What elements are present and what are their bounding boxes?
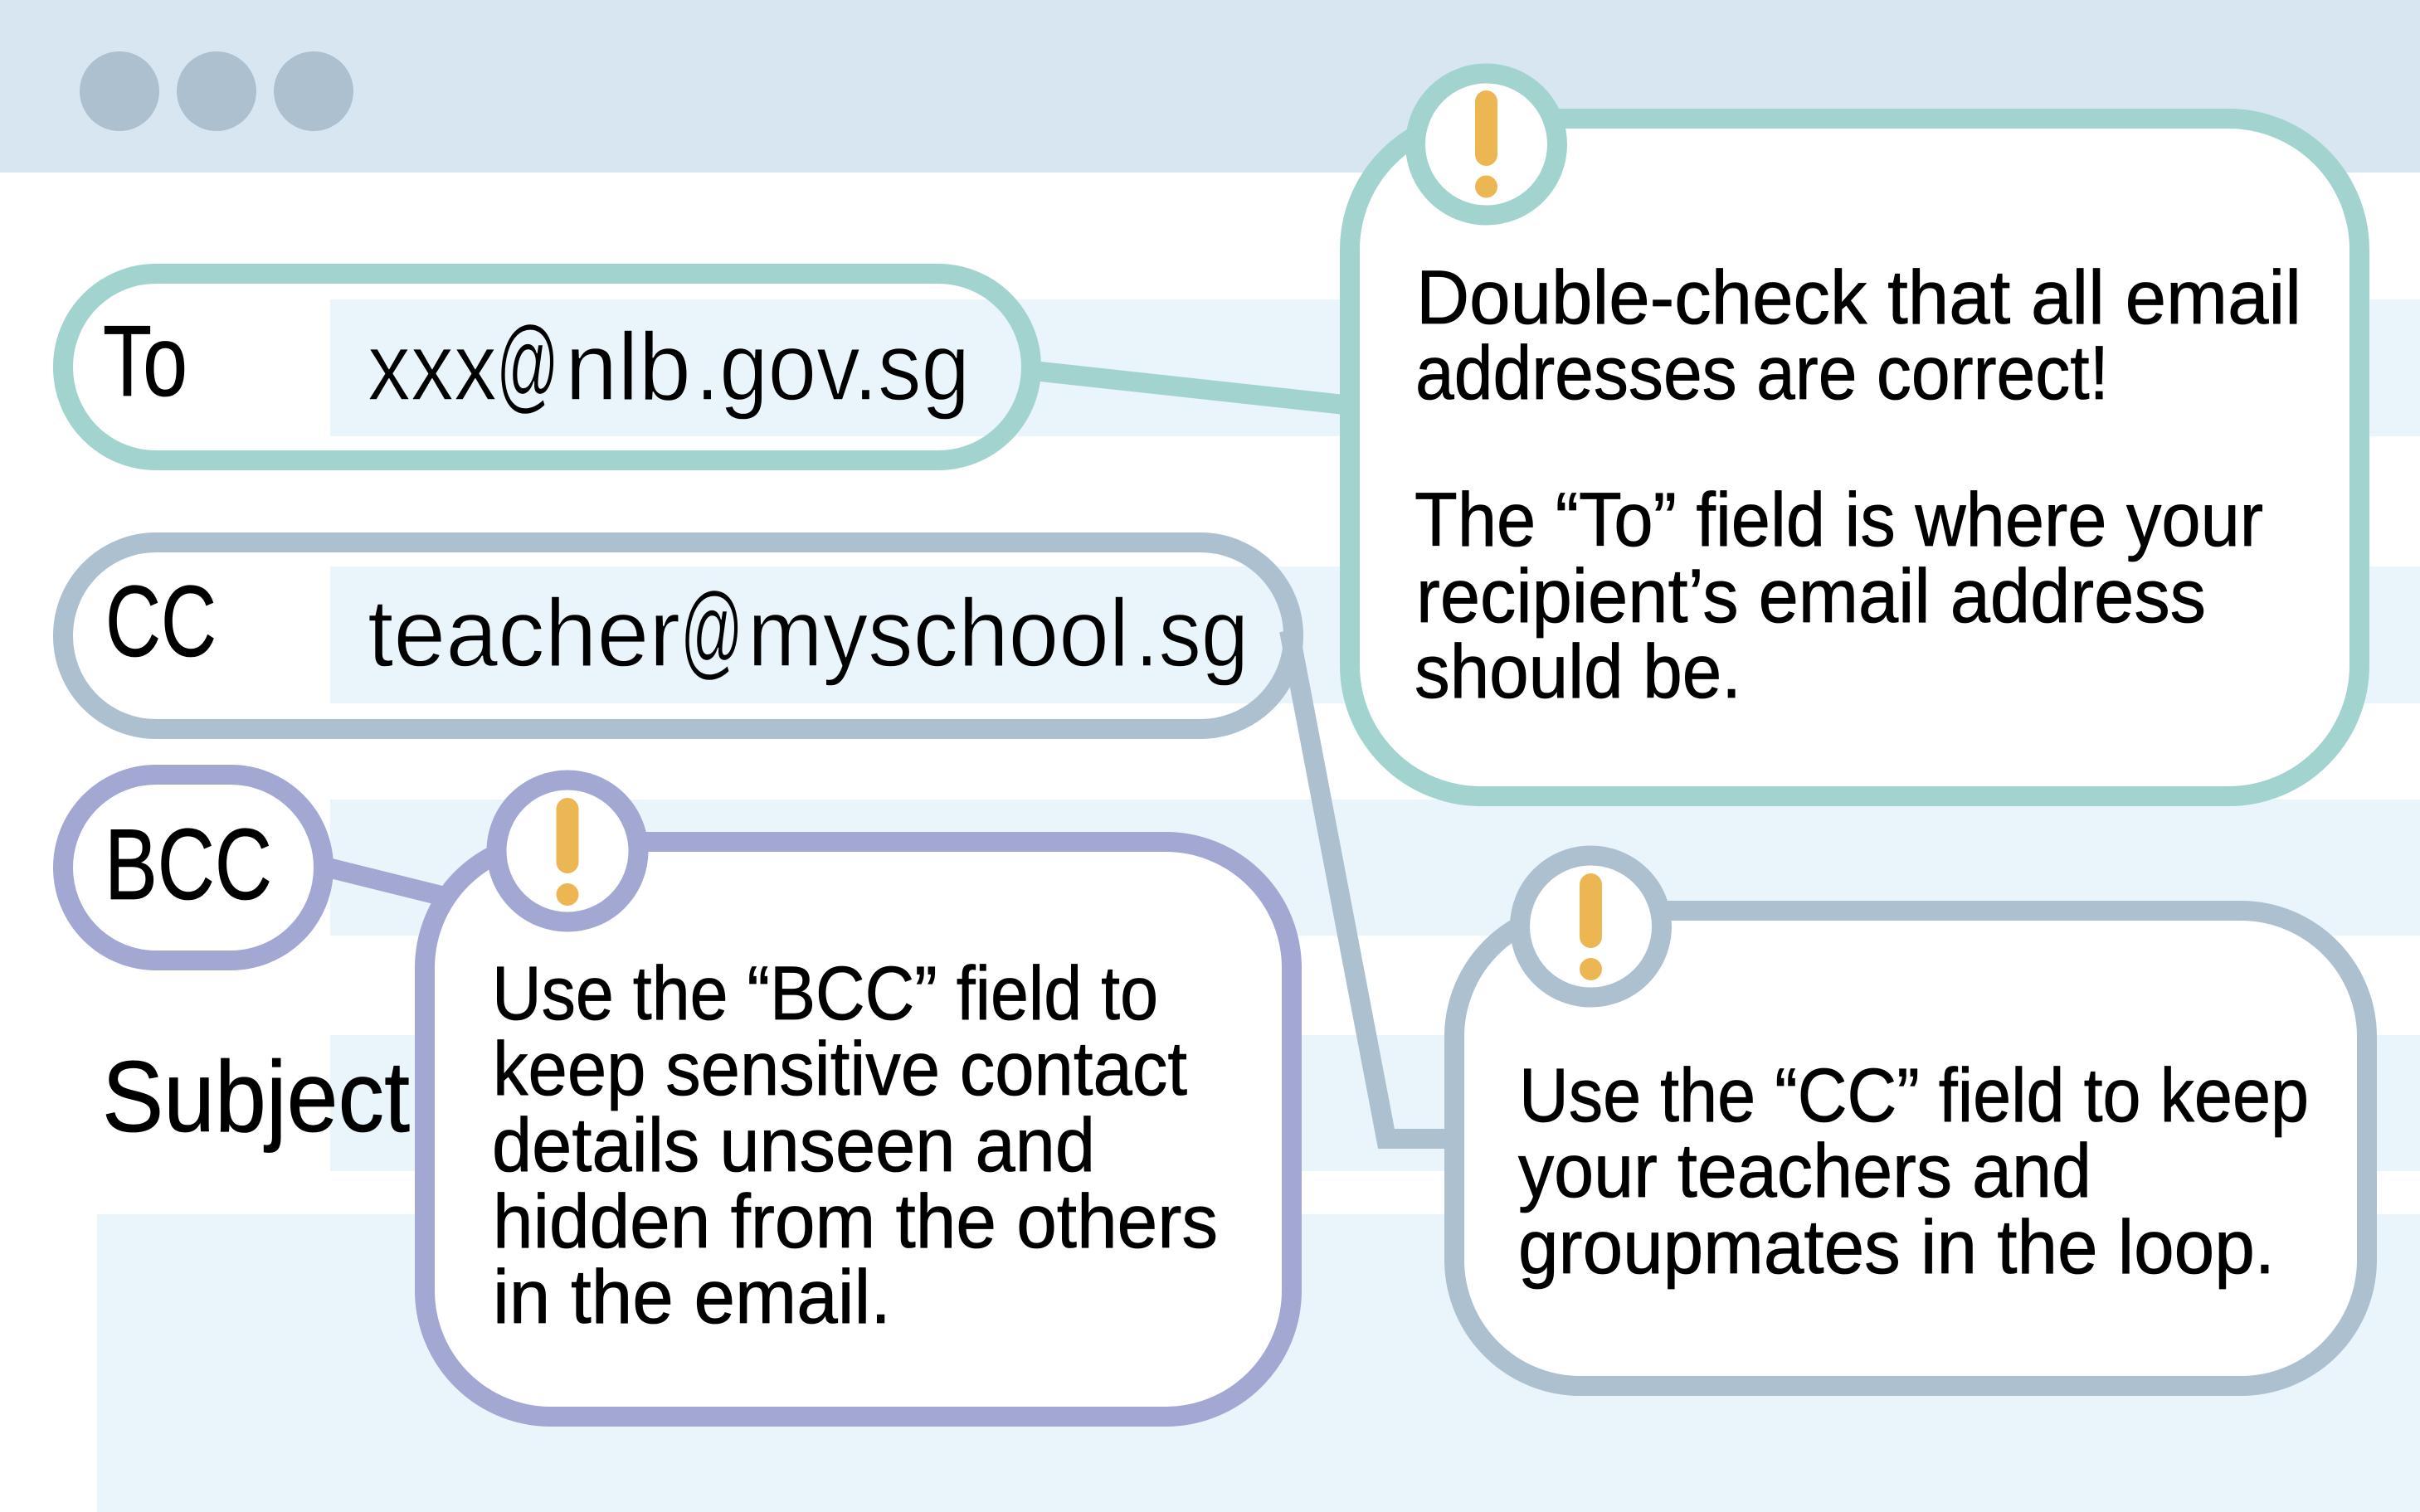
callout text: groupmates in the loop. [1518, 1205, 2275, 1290]
value: To address: @ [496, 305, 559, 422]
To field [63, 274, 1031, 460]
callout text: Use the “CC” field to keep [1519, 1053, 2309, 1138]
callout text: should be. [1415, 630, 1741, 714]
connector: BCC field to callout [328, 868, 448, 897]
callout text: recipient’s email address [1416, 554, 2206, 639]
connector: To field to callout [1033, 371, 1352, 406]
browser header bar [0, 0, 2420, 173]
label: To: To [103, 304, 187, 417]
CC field [63, 542, 1293, 729]
label: CC: CC [105, 565, 217, 678]
callout text: in the email. [493, 1255, 891, 1339]
icon: exclamation badge [1520, 856, 1662, 997]
label: BCC: BCC [105, 808, 272, 921]
value: CC address: @ [680, 571, 743, 688]
BCC field [63, 775, 324, 960]
value: To address: xxx [368, 313, 497, 421]
callout text [1518, 1053, 2309, 1290]
callout: To field [1350, 73, 2359, 796]
callout text [1415, 255, 2301, 714]
callout text: The “To” field is where your [1415, 478, 2263, 562]
callout text: Use the “BCC” field to [492, 951, 1158, 1036]
callout text: addresses are correct! [1415, 331, 2109, 416]
callout text: details unseen and [492, 1103, 1095, 1188]
value: To address: nlb [565, 313, 691, 421]
callout text: hidden from the others [493, 1179, 1218, 1264]
icon: exclamation badge [496, 780, 639, 922]
connector: CC field to callout [1289, 630, 1460, 1139]
callout text [492, 951, 1218, 1339]
Subject label: Subject [102, 1040, 410, 1153]
callout: BCC field [425, 780, 1292, 1417]
icon: exclamation badge [1415, 73, 1557, 216]
email body area [97, 1214, 2420, 1512]
callout: CC field [1454, 856, 2367, 1386]
value: CC address: .sg [1135, 579, 1249, 687]
value: To address: .gov.sg [695, 313, 970, 421]
callout text: your teachers and [1518, 1129, 2091, 1213]
value: CC address: myschool [747, 579, 1129, 687]
callout text: keep sensitive contact [493, 1027, 1187, 1111]
value: CC address: teacher [368, 579, 680, 687]
callout text: Double-check that all email [1416, 255, 2301, 340]
